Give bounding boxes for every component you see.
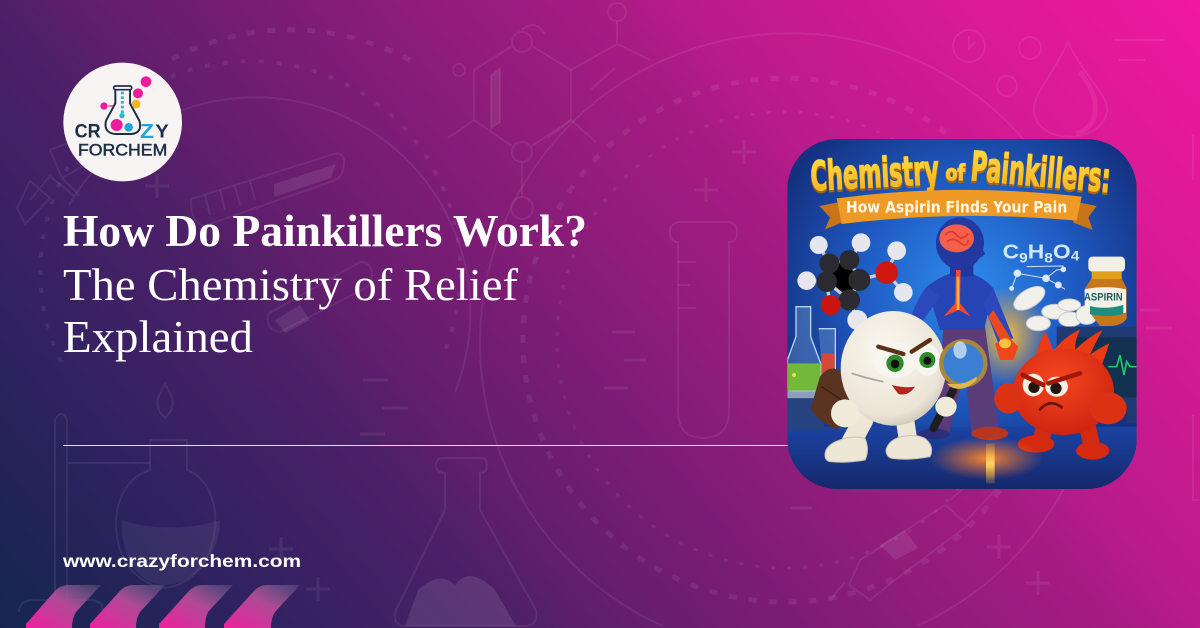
logo wordmark: CR bbox=[75, 121, 101, 142]
lab bench left bbox=[787, 390, 824, 430]
formula label: H bbox=[1028, 240, 1044, 263]
tablets bbox=[1013, 286, 1096, 332]
pill character bbox=[825, 311, 946, 462]
logo wordmark bbox=[75, 120, 169, 159]
title face: of bbox=[946, 161, 966, 186]
back glow bbox=[984, 289, 1048, 384]
title shadow: of bbox=[946, 162, 966, 187]
divider line bbox=[63, 445, 793, 446]
formula label: O bbox=[1053, 240, 1071, 263]
logo wordmark: FORCHEM bbox=[78, 140, 167, 159]
website url: www.crazyforchem.com bbox=[62, 551, 301, 571]
magnifying glass bbox=[933, 341, 985, 428]
title shadow: Chemistry bbox=[809, 147, 940, 202]
ribbon banner bbox=[819, 190, 1097, 230]
logo wordmark: Z bbox=[140, 121, 154, 143]
ribbon banner: How Aspirin Finds Your Pain bbox=[846, 198, 1067, 217]
aspirin bottle: ASPIRIN bbox=[1084, 292, 1123, 304]
logo badge bbox=[63, 63, 182, 181]
satchel bag bbox=[810, 368, 850, 430]
illustration card bbox=[787, 139, 1137, 489]
formula label: 9 bbox=[1019, 249, 1028, 265]
title face: Chemistry bbox=[809, 146, 940, 200]
formula label: C bbox=[1003, 240, 1018, 263]
brain bbox=[939, 224, 974, 252]
chevron stripes bbox=[26, 585, 300, 628]
headline: Explained bbox=[63, 312, 253, 362]
floor light reflection bbox=[930, 437, 1043, 483]
logo flask bbox=[100, 76, 151, 134]
aspirin bottle bbox=[1084, 257, 1127, 326]
logo wordmark: Y bbox=[155, 120, 169, 141]
formula label: 8 bbox=[1044, 249, 1053, 265]
human silhouette bbox=[912, 217, 1018, 440]
headline: The Chemistry of Relief bbox=[63, 260, 518, 310]
headline: How Do Painkillers Work? bbox=[63, 206, 587, 256]
lab floor bbox=[787, 427, 1137, 489]
pain character bbox=[994, 329, 1127, 460]
glass flasks bbox=[787, 307, 835, 391]
headline bbox=[63, 206, 587, 362]
small molecule diagram bbox=[1010, 266, 1066, 290]
molecule model bbox=[797, 233, 913, 330]
formula label: 4 bbox=[1071, 247, 1080, 263]
card title bbox=[809, 142, 1113, 204]
bench and monitor bbox=[1057, 327, 1137, 423]
